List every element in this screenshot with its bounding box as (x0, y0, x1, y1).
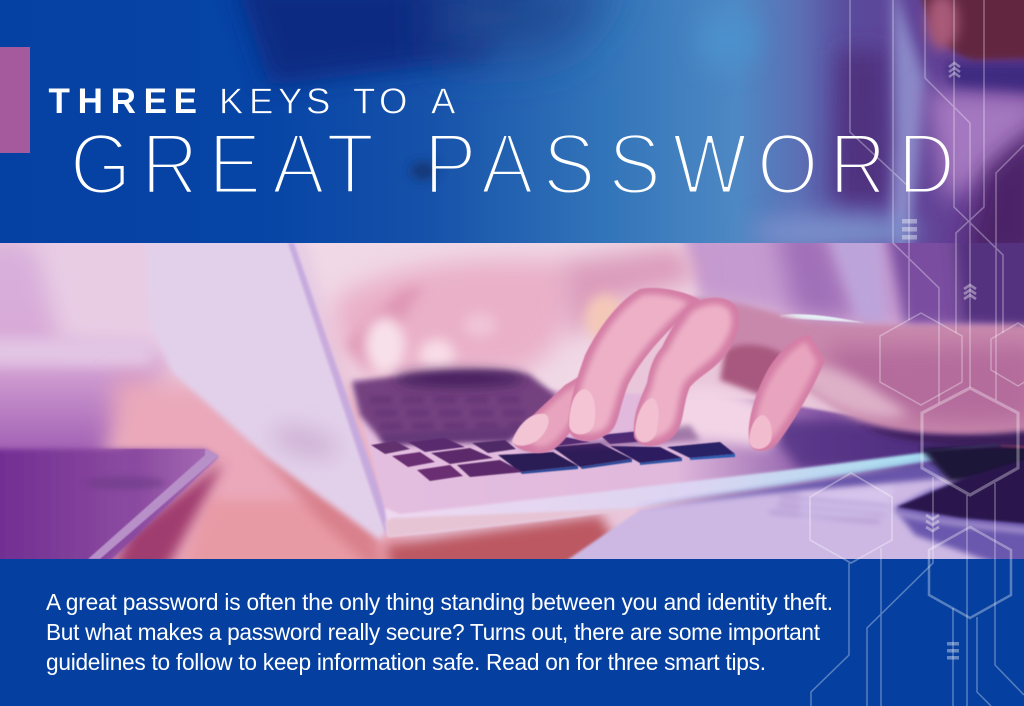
fingernail: index (512, 414, 549, 446)
background lavender behind keyboard (309, 243, 704, 390)
papers (566, 478, 987, 559)
photo: hands typing on a laptop (0, 243, 1024, 559)
keyboard blurred far keys (352, 370, 562, 445)
fingernail: middle (569, 389, 595, 434)
header background photo (239, 0, 1024, 243)
icon: chevrons down (926, 515, 939, 531)
shadow under fingers (520, 425, 700, 450)
icon: chevrons up middle (964, 285, 976, 299)
blurred left hand (334, 245, 700, 378)
large hexagon (922, 388, 1018, 495)
intro text block: A great password is often the only thing standing between you and identity theft. (46, 589, 833, 615)
hexagon lower (810, 473, 892, 563)
keyboard keys (371, 430, 735, 481)
fingernail: ring (635, 398, 659, 442)
icon: chevrons up top (949, 63, 960, 77)
icon: bars lower (947, 642, 959, 660)
title (48, 88, 950, 192)
finger: index (514, 377, 578, 454)
left blurred background (0, 243, 169, 453)
tablet on table (0, 445, 228, 559)
hexagon outline right (991, 323, 1024, 386)
accent block (0, 47, 30, 153)
intro text block: But what makes a password really secure? Turns out, there are some important (46, 619, 821, 645)
title words: great password (76, 135, 950, 192)
circuit line overlay (810, 0, 1024, 706)
intro text block (46, 589, 833, 675)
laptop deck (356, 379, 964, 514)
typing hand (512, 288, 1024, 453)
icon: bars upper (902, 219, 917, 240)
finger: middle (568, 288, 700, 441)
intro text block: guidelines to follow to keep information safe. Read on for three smart tips. (46, 649, 766, 675)
right side background shirt (681, 243, 989, 326)
laptop front edge (385, 443, 1000, 537)
table (97, 374, 410, 559)
photo backdrop (0, 243, 1024, 559)
intro panel background (0, 559, 1024, 706)
back of hand (690, 298, 1024, 436)
hexagon bottom (929, 527, 1011, 618)
laptop screen edge (288, 243, 390, 535)
circuit traces (811, 0, 1024, 706)
finger: little (749, 335, 825, 451)
hexagon outline (880, 313, 962, 405)
laptop lid (162, 340, 386, 542)
title words: keys to a (222, 88, 455, 114)
title word: three: THREE (48, 82, 197, 121)
fingernail: little (749, 415, 772, 449)
phone on the right (894, 440, 1024, 565)
finger: ring (634, 298, 739, 446)
